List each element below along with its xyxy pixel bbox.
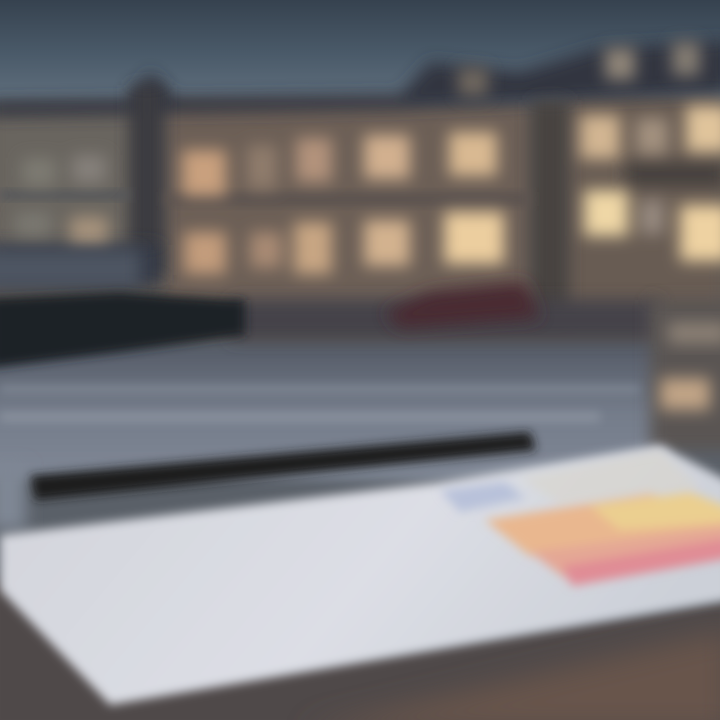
- paper document: [0, 445, 720, 705]
- dark pen: [28, 432, 536, 500]
- table surface: [0, 570, 720, 720]
- dark car left: [0, 250, 245, 368]
- roofline: [0, 40, 720, 116]
- road streaks: [0, 385, 640, 422]
- right lights column: [650, 300, 720, 450]
- red car: [385, 282, 540, 328]
- street base band: [230, 300, 660, 340]
- background sky: [0, 0, 720, 120]
- building facade: [0, 40, 720, 340]
- floor bands: [165, 192, 530, 206]
- windows: [15, 42, 720, 274]
- chart colour bands: [440, 450, 720, 586]
- left edge strip: [0, 465, 26, 530]
- lower left dark: [0, 245, 160, 285]
- dark columns: [130, 85, 164, 275]
- road: [0, 345, 670, 480]
